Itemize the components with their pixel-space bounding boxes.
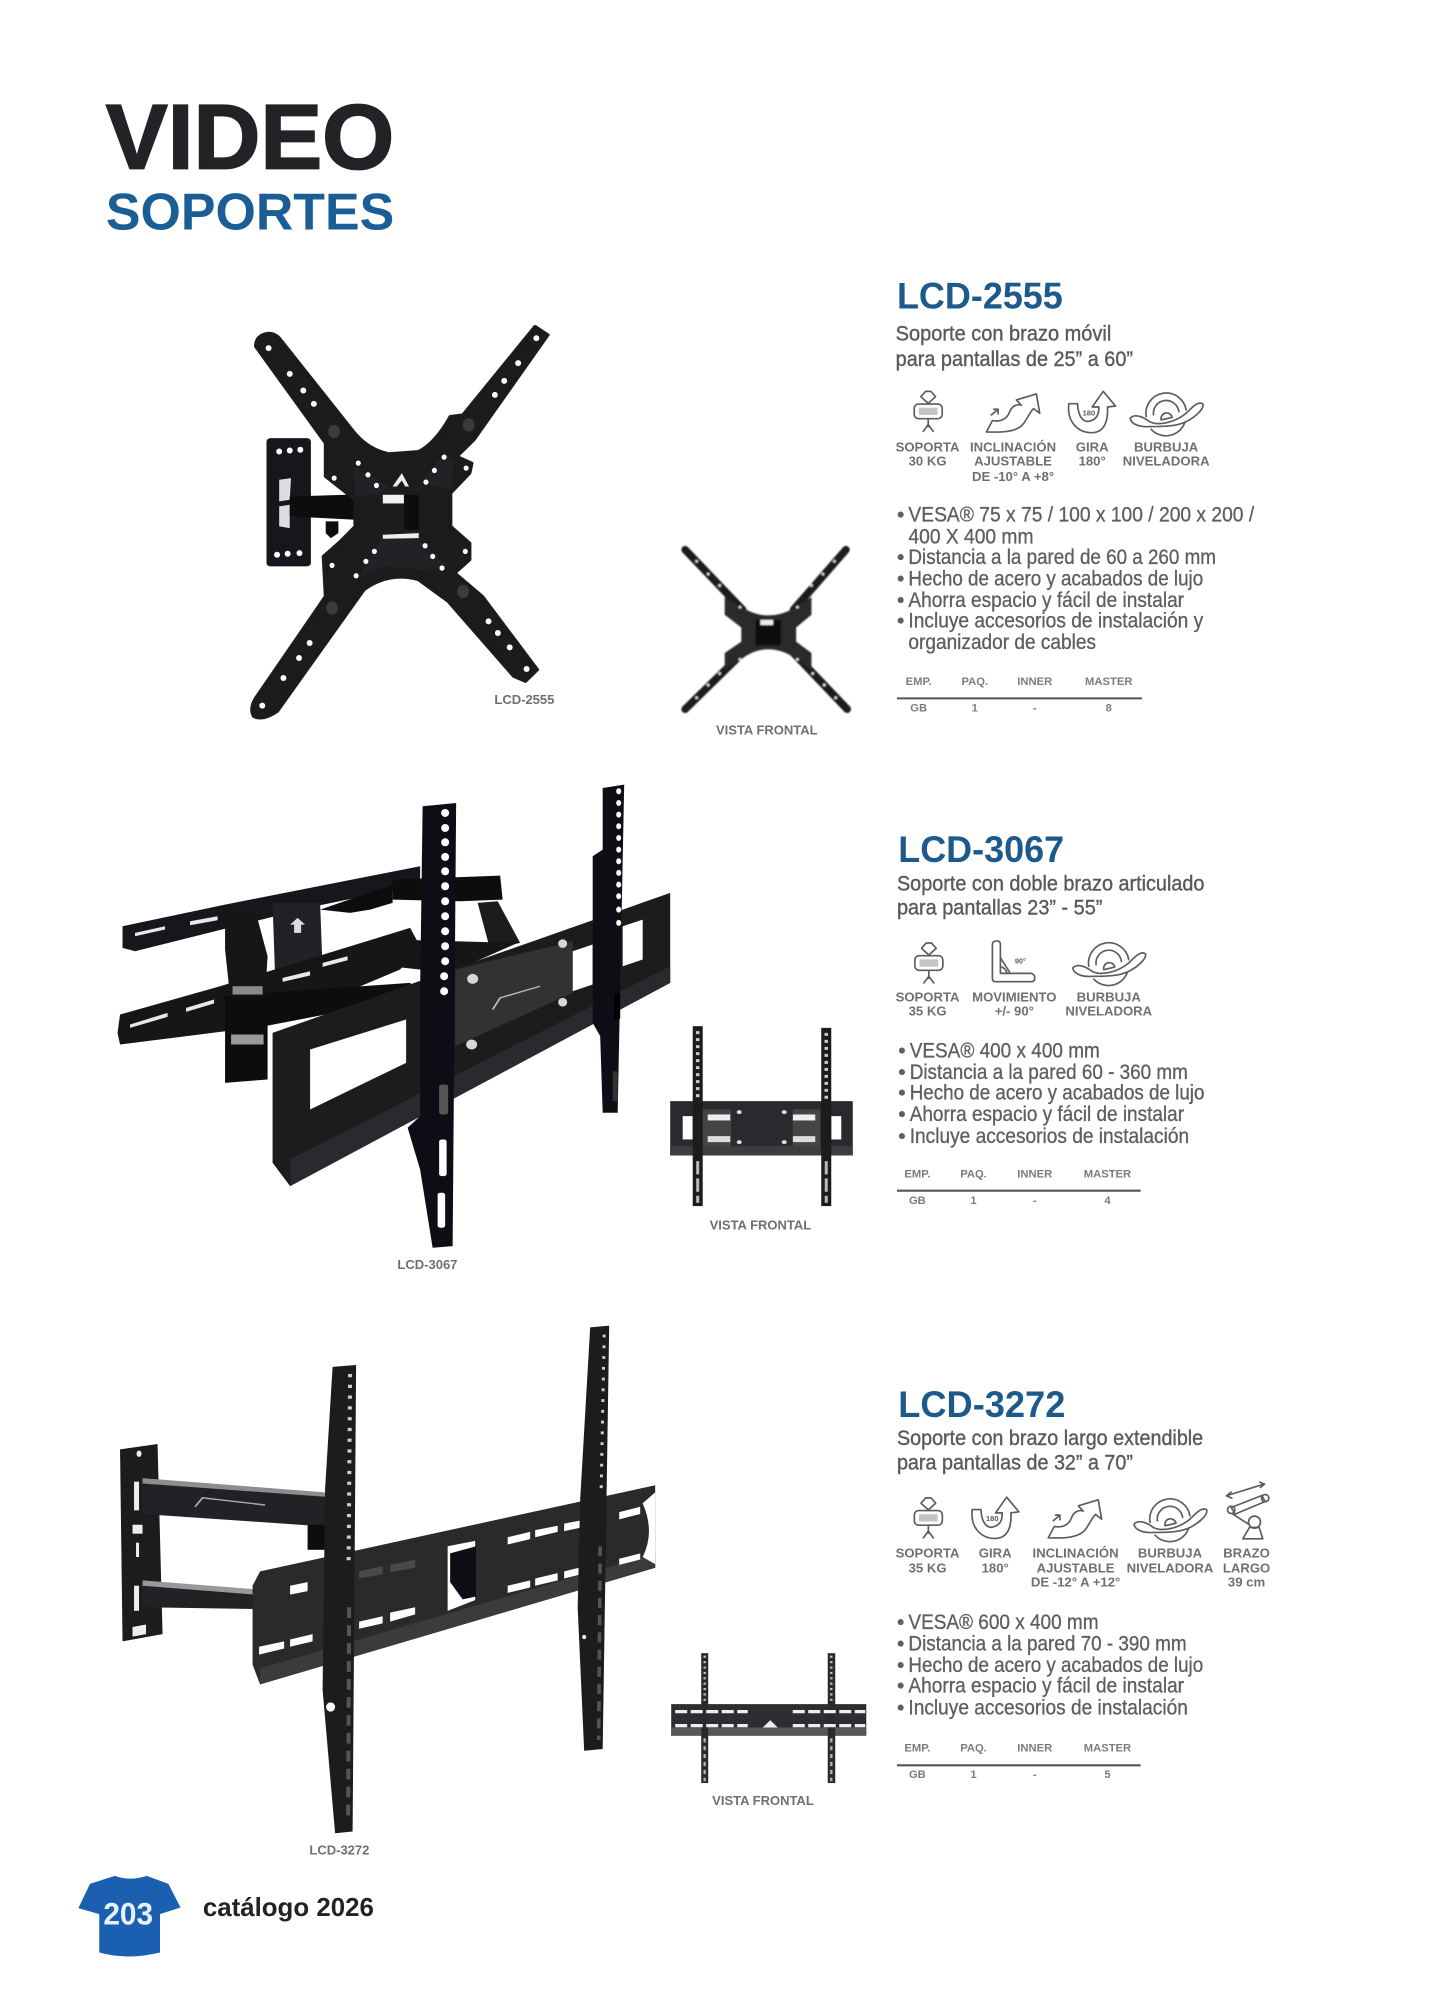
feature list: • xyxy=(897,610,904,633)
description: para pantallas de 25” a 60” xyxy=(896,348,1133,371)
panel: product LCD-3272 details xyxy=(896,1384,1270,1781)
packing table: GB xyxy=(909,1195,926,1207)
feature list: • xyxy=(897,546,904,569)
packing table: 5 xyxy=(1104,1769,1111,1781)
feature list: Ahorra espacio y fácil de instalar xyxy=(910,1103,1184,1126)
feature list: • xyxy=(897,1654,904,1677)
icon labels: BURBUJA xyxy=(1077,989,1141,1004)
feature list: • xyxy=(898,1125,906,1148)
feature list: organizador de cables xyxy=(908,631,1096,654)
packing table: PAQ. xyxy=(961,676,988,688)
feature list: Hecho de acero y acabados de lujo xyxy=(908,567,1203,590)
packing table: EMP. xyxy=(906,676,932,688)
feature list: • xyxy=(898,1103,906,1126)
packing table: 1 xyxy=(970,1769,977,1781)
feature list: • xyxy=(897,1611,904,1634)
icon: gira 180 xyxy=(1069,391,1116,433)
icon: brazo largo xyxy=(1226,1482,1269,1539)
packing table xyxy=(897,1168,1141,1207)
icon labels: 30 KG xyxy=(909,454,947,469)
packing table: GB xyxy=(910,703,927,715)
packing table: PAQ. xyxy=(960,1168,987,1180)
panel: product LCD-2555 details xyxy=(896,276,1254,715)
description: Soporte con brazo móvil xyxy=(896,323,1111,346)
icon: burbuja xyxy=(1073,943,1146,986)
packing table: INNER xyxy=(1017,676,1052,688)
caption: LCD-2555: LCD-2555 xyxy=(494,692,554,707)
caption: vista frontal: VISTA FRONTAL xyxy=(716,723,818,738)
icon: inclinacion xyxy=(1048,1500,1102,1538)
icon labels: BRAZO xyxy=(1223,1545,1270,1560)
panel: product LCD-2555 images xyxy=(252,327,847,738)
description: Soporte con brazo largo extendible xyxy=(897,1427,1203,1450)
feature list: VESA® 75 x 75 / 100 x 100 / 200 x 200 / xyxy=(908,504,1254,527)
packing table: - xyxy=(1033,703,1037,715)
heading: LCD-3067: LCD-3067 xyxy=(898,829,1064,870)
description xyxy=(896,323,1133,371)
icon labels: INCLINACIÓN xyxy=(970,440,1056,455)
icon labels: INCLINACIÓN xyxy=(1033,1545,1119,1560)
title: VIDEO: VIDEO xyxy=(106,86,394,188)
feature list: Distancia a la pared 70 - 390 mm xyxy=(908,1633,1187,1656)
packing table: MASTER xyxy=(1084,1168,1131,1180)
icon labels: NIVELADORA xyxy=(1127,1561,1214,1576)
icon: inclinacion xyxy=(986,394,1040,432)
caption: vista frontal: VISTA FRONTAL xyxy=(712,1793,814,1808)
icon: soporta 30 kg xyxy=(914,391,942,431)
feature list: • xyxy=(897,589,904,612)
packing table: INNER xyxy=(1017,1168,1052,1180)
photo: LCD-2555 front view xyxy=(685,550,847,709)
icon labels: LARGO xyxy=(1223,1561,1270,1576)
icon: burbuja xyxy=(1130,393,1203,436)
feature list: VESA® 400 x 400 mm xyxy=(910,1039,1100,1062)
icon labels: SOPORTA xyxy=(896,440,960,455)
packing table: 1 xyxy=(970,1195,977,1207)
icon labels xyxy=(896,440,1210,484)
feature list: • xyxy=(897,504,904,527)
page number: 203 xyxy=(103,1896,153,1932)
icon labels: SOPORTA xyxy=(896,989,960,1004)
icon: gira 180 xyxy=(972,1497,1019,1539)
packing table: PAQ. xyxy=(960,1742,987,1754)
feature list: • xyxy=(898,1081,906,1104)
packing table: 8 xyxy=(1106,703,1112,715)
feature list xyxy=(897,1611,1203,1719)
icon labels: BURBUJA xyxy=(1138,1545,1203,1560)
icon labels xyxy=(896,1545,1270,1590)
feature list: Distancia a la pared 60 - 360 mm xyxy=(910,1061,1188,1084)
feature list: Incluye accesorios de instalación xyxy=(910,1125,1189,1148)
photo: LCD-2555 mount xyxy=(252,327,548,718)
icon labels: DE -10° A +8° xyxy=(972,469,1054,484)
photo: LCD-3067 mount xyxy=(118,785,670,1248)
panel: product LCD-3067 images xyxy=(118,785,853,1272)
panel: product LCD-3067 details xyxy=(896,829,1204,1207)
caption: LCD-3067: LCD-3067 xyxy=(397,1257,457,1272)
packing table: INNER xyxy=(1017,1742,1052,1754)
feature list: Ahorra espacio y fácil de instalar xyxy=(908,589,1184,612)
photo: LCD-3272 front view xyxy=(671,1653,866,1783)
footer: page number shirt xyxy=(78,1876,181,1957)
icon: soporta 35 kg xyxy=(914,1498,942,1538)
feature list: Hecho de acero y acabados de lujo xyxy=(908,1654,1203,1677)
feature list: • xyxy=(897,567,904,590)
packing table: EMP. xyxy=(904,1168,930,1180)
icon labels: 180° xyxy=(1079,454,1106,469)
icon labels: 39 cm xyxy=(1228,1575,1265,1590)
icon labels: AJUSTABLE xyxy=(1037,1561,1115,1576)
packing table: MASTER xyxy=(1084,1742,1131,1754)
description: para pantallas 23” - 55” xyxy=(897,897,1102,920)
photo: LCD-3272 mount xyxy=(120,1326,655,1833)
feature list xyxy=(898,1039,1204,1148)
feature list: VESA® 600 x 400 mm xyxy=(908,1611,1099,1634)
description: Soporte con doble brazo articulado xyxy=(897,872,1204,895)
packing table: GB xyxy=(909,1769,926,1781)
description: para pantallas de 32” a 70” xyxy=(897,1451,1133,1474)
panel: product LCD-3272 images xyxy=(120,1326,866,1858)
icon labels: 35 KG xyxy=(909,1003,947,1018)
feature list: • xyxy=(897,1696,904,1719)
packing table: 1 xyxy=(972,703,978,715)
description xyxy=(897,872,1204,920)
icon labels: NIVELADORA xyxy=(1123,454,1210,469)
icon labels: 35 KG xyxy=(909,1561,947,1576)
icon: movimiento 90 xyxy=(992,941,1035,982)
feature list: Ahorra espacio y fácil de instalar xyxy=(908,1675,1184,1698)
packing table: - xyxy=(1033,1769,1037,1781)
feature list: • xyxy=(898,1039,906,1062)
feature list: 400 X 400 mm xyxy=(908,525,1033,548)
icon labels: GIRA xyxy=(1076,440,1109,455)
feature list: Incluye accesorios de instalación xyxy=(908,1696,1188,1719)
feature list: Hecho de acero y acabados de lujo xyxy=(910,1081,1204,1104)
heading: LCD-3272: LCD-3272 xyxy=(898,1384,1065,1425)
packing table: 4 xyxy=(1104,1195,1111,1207)
icon labels: BURBUJA xyxy=(1134,440,1199,455)
feature list xyxy=(897,504,1254,654)
photo: LCD-3067 front view xyxy=(670,1026,853,1206)
icon: blue t-shirt xyxy=(78,1876,181,1957)
feature list: • xyxy=(897,1633,904,1656)
subtitle: SOPORTES: SOPORTES xyxy=(106,184,394,242)
feature list: Incluye accesorios de instalación y xyxy=(908,610,1204,633)
icon labels: DE -12° A +12° xyxy=(1031,1575,1120,1590)
icon labels: MOVIMIENTO xyxy=(972,989,1057,1004)
icon: burbuja xyxy=(1134,1499,1207,1542)
packing table xyxy=(897,676,1142,715)
icon labels: GIRA xyxy=(979,1545,1012,1560)
caption: LCD-3272: LCD-3272 xyxy=(309,1843,369,1858)
packing table: EMP. xyxy=(904,1742,930,1754)
packing table: MASTER xyxy=(1085,676,1132,688)
icon labels xyxy=(896,989,1153,1018)
heading: LCD-2555: LCD-2555 xyxy=(897,276,1063,317)
icon: soporta 35 kg xyxy=(915,943,943,983)
icon labels: NIVELADORA xyxy=(1065,1003,1153,1018)
feature list: • xyxy=(898,1061,906,1084)
feature list: • xyxy=(897,1675,904,1698)
icon labels: 180° xyxy=(982,1561,1009,1576)
packing table: - xyxy=(1033,1195,1037,1207)
icon labels: SOPORTA xyxy=(896,1545,960,1560)
packing table xyxy=(897,1742,1141,1781)
feature list: Distancia a la pared de 60 a 260 mm xyxy=(908,546,1216,569)
icon labels: +/- 90° xyxy=(995,1003,1034,1018)
footer: catalogue label: catálogo 2026 xyxy=(203,1892,374,1922)
description xyxy=(897,1427,1203,1474)
icon labels: AJUSTABLE xyxy=(974,454,1052,469)
caption: vista frontal: VISTA FRONTAL xyxy=(710,1218,811,1233)
